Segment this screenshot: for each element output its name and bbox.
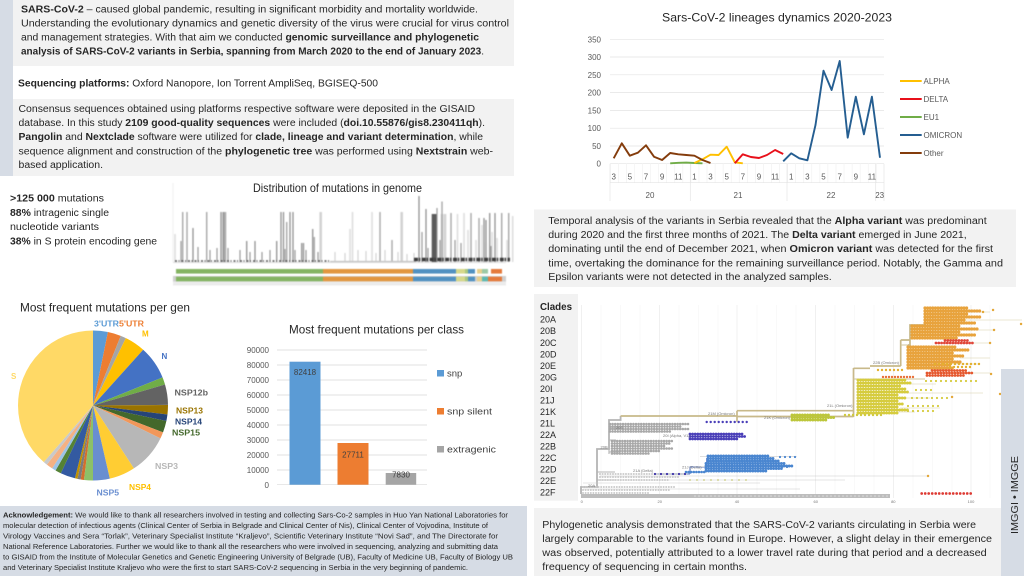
bar legend: snp silent (447, 406, 492, 418)
chart: lineage dynamics line chart: 20 (646, 191, 655, 200)
chart: lineage dynamics line chart: 1 (692, 172, 697, 182)
panel: temporal analysis: Temporal analysis of the variants in Serbia revealed that the Alpha variant was predominant (548, 216, 987, 227)
chart: lineage dynamics line chart: 3 (611, 172, 616, 182)
pie labels: NSP13 (176, 406, 204, 415)
panel: acknowledgement: Acknowledgement: We would like to thank all researchers involved in testing and collecting Sars-Co-2 samples in Huo Yan National Laboratories for (3, 510, 508, 520)
panel: clades list: Clades (540, 301, 572, 313)
panel: phylogenetic conclusion: frequency of sequencing in certain months. (542, 562, 747, 573)
panel: acknowledgement: molecular detection of infectious agents (Clinical Center of Serbia in Belgrade and Clinical Center of Nis), Clinical Center of Vojvodina, Institute of (3, 521, 489, 530)
chart: bars of mutations per class: 27711 (342, 450, 364, 460)
panel: clades list: 20B (540, 326, 556, 336)
line chart legend: Other (924, 149, 944, 158)
panel: methods: database. In this study 2109 good-quality sequences were included ( doi.10.55876/gis8.230411qh ). (18, 118, 485, 129)
pie labels: NSP3 (155, 462, 179, 471)
tree clade labels (588, 360, 900, 488)
panel: methods: sequence alignment and construction of the phylogenetic tree was performed using Nextstrain web- (18, 146, 493, 158)
panel: clades list: 22E (540, 476, 556, 486)
panel: acknowledgement: and Veterinary Specialist Institute Kraljevo who were the first to start SARS-CoV-2 sequencing in Serbia in the very beginning of pandemic. (3, 563, 468, 572)
bar legend: snp (447, 369, 462, 380)
chart: lineage dynamics line chart: 7 (741, 172, 746, 182)
panel: clades list: 20D (540, 349, 557, 359)
tree axis labels: 20 (657, 499, 663, 504)
chart: bars of mutations per class: 0 (265, 481, 270, 490)
panel: methods (13, 99, 514, 176)
chart: lineage dynamics line chart: 11 (771, 172, 780, 182)
chart: lineage dynamics line chart: 1 (789, 172, 794, 182)
panel: temporal analysis: Epsilon variants were not detected in the analyzed samples. (548, 272, 832, 283)
panel: clades list: 22D (540, 465, 557, 475)
chart: lineage dynamics line chart: 150 (588, 106, 602, 115)
pie labels (11, 320, 208, 498)
tree clade labels: 21A (Delta) (633, 468, 654, 473)
text block: mutation statistics: 88% intragenic single (10, 208, 109, 219)
tree axis labels: 40 (735, 499, 740, 504)
chart: lineage dynamics line chart: 3 (708, 172, 713, 182)
chart: lineage dynamics line chart: 300 (588, 53, 602, 62)
tree axis labels: 0 (581, 499, 584, 504)
heading: distribution of mutations: Distribution of mutations in genome (253, 181, 422, 195)
genome annotation bars (173, 269, 506, 286)
chart: lineage dynamics line chart: 5 (628, 172, 633, 182)
panel: clades list: 20G (540, 372, 557, 382)
tree clade labels: 21M (Omicron) (708, 411, 735, 416)
chart: lineage dynamics line chart: 100 (588, 124, 602, 133)
panel: acknowledgement: Virology Vaccines and Sera “Torlak”, Veterinary Specialist Institute “Kraljevo”, Scientific Veterinary Institute “Novi Sad”, and The Directorate for (3, 532, 498, 540)
pie labels: NSP15 (172, 429, 201, 438)
tree clade labels: 21J (Delta) (682, 464, 702, 470)
tree axis labels: 100 (968, 499, 975, 504)
tree axis labels (581, 499, 975, 504)
panel: introduction (13, 0, 514, 66)
heading: lineages dynamics: Sars-CoV-2 lineages dynamics 2020-2023 (662, 10, 892, 24)
pie labels: 3'UTR (94, 320, 119, 329)
pie labels: M (142, 330, 149, 339)
line chart legend: DELTA (924, 95, 949, 104)
panel: introduction: Understanding the evolutionary dynamics and genetic diversity of the virus were crucial for virus control (21, 18, 509, 30)
side strip: institute name (1001, 369, 1024, 576)
chart: lineage dynamics line chart: 23 (875, 191, 885, 200)
chart: lineage dynamics line chart: 9 (757, 172, 762, 182)
chart: lineage dynamics line chart: 7 (644, 172, 649, 182)
pie labels: 5'UTR (119, 320, 144, 329)
chart: lineage dynamics line chart: 3 (805, 172, 810, 182)
panel: clades list: 22F (540, 488, 556, 498)
chart: bars of mutations per class: 50000 (247, 406, 270, 415)
chart: bars of mutations per class: 60000 (247, 391, 270, 400)
panel: acknowledgement: to GISAID from the Institute of Molecular Genetics and Genetic Engineering University of Belgrade (UB), Faculty of Medicine UB, Faculty of Biology UB (3, 552, 513, 562)
pie labels: NSP5 (96, 489, 120, 498)
chart: lineage dynamics line chart: 0 (597, 160, 602, 169)
tree axis labels: 60 (813, 499, 819, 504)
panel: acknowledgement (0, 506, 527, 576)
panel: clades list: 20A (540, 315, 556, 325)
panel: clades list (534, 294, 578, 501)
panel: methods: based application. (18, 160, 103, 171)
chart: bars of mutations per class: 30000 (247, 436, 270, 445)
panel: clades list: 22A (540, 430, 556, 440)
heading: mutations per class: Most frequent mutations per class (289, 322, 464, 336)
line chart legend (900, 77, 962, 158)
chart: bars of mutations per class: 70000 (247, 376, 270, 385)
chart: bars of mutations per class (247, 346, 496, 490)
left accent strip (0, 0, 13, 176)
chart: pie of mutations per gene (56, 368, 130, 443)
panel: introduction: and management strategies. With that aim we conducted genomic surveillance and phylogenetic (21, 32, 479, 44)
panel: acknowledgement: National Reference Laboratories. Further we would like to thank all the researchers who were involved in sequencing, analyzing and submitting data (3, 542, 499, 551)
text block: mutation statistics: nucleotide variants (10, 222, 99, 233)
chart: lineage dynamics line chart: 50 (592, 142, 602, 151)
tree axis labels: 80 (891, 499, 896, 504)
line chart legend: OMICRON (924, 131, 962, 140)
panel: clades list: 22B (540, 442, 556, 452)
chart: lineage dynamics line chart: 350 (588, 35, 602, 44)
panel: methods: Consensus sequences obtained using platforms respective software were deposited in the GISAID (18, 104, 475, 115)
panel: clades list: 20C (540, 338, 557, 348)
chart: lineage dynamics line chart (588, 35, 962, 201)
chart: lineage dynamics line chart: 7 (837, 172, 842, 182)
tree clade labels: 20E (616, 425, 623, 430)
chart: lineage dynamics line chart: 9 (660, 172, 665, 182)
bar legend (437, 369, 496, 456)
panel: clades list: 22C (540, 453, 557, 463)
tree tips (583, 308, 1021, 496)
chart: bars of mutations per class: 10000 (247, 466, 270, 475)
tree clade labels: 20I (Alpha, V1) (663, 433, 690, 438)
bar legend: extragenic (447, 444, 496, 456)
pie labels: NSP4 (129, 483, 152, 492)
chart: lineage dynamics line chart: 5 (821, 172, 826, 182)
panel: phylogenetic conclusion: Phylogenetic analysis demonstrated that the SARS-CoV-2 variants circulating in Serbia were (542, 520, 976, 531)
chart: bars of mutations per class: 82418 (294, 368, 317, 377)
tree clade labels: 20B (600, 444, 608, 450)
chart: bars of mutations per class: 7830 (392, 470, 410, 480)
heading: mutations per gene: Most frequent mutations per gen (20, 300, 190, 314)
text block: sequencing platforms: Sequencing platforms: Oxford Nanopore, Ion Torrent AmpliSeq, BGISEQ-500 (18, 78, 378, 90)
pie labels: NSP14 (175, 417, 203, 426)
text block: mutation statistics: >125 000 mutations (10, 194, 104, 204)
line chart legend: ALPHA (924, 77, 950, 86)
line chart legend: EU1 (924, 113, 940, 122)
chart: bars of mutations per class: 80000 (247, 361, 270, 370)
text block: mutation statistics: 38% in S protein encoding gene (10, 236, 157, 248)
chart: lineage dynamics line chart: 11 (868, 172, 877, 182)
panel: clades list: 20E (540, 361, 556, 371)
panel: clades list: 21K (540, 407, 556, 417)
panel: clades list: 20I (540, 384, 553, 394)
chart: lineage dynamics line chart: 200 (588, 89, 602, 98)
panel: clades list: 21L (540, 418, 555, 428)
text block: mutation statistics (10, 194, 157, 248)
tree backbone (581, 307, 1022, 498)
pie labels: S (11, 372, 17, 381)
panel: introduction: SARS-CoV-2 – caused global pandemic, resulting in significant morbidity and mortality worldwide. (21, 4, 478, 16)
panel: temporal analysis: time, overtaking the dominance for the remaining surveillance period. Notably, the Gamma and (548, 258, 1003, 270)
chart: lineage dynamics line chart: 9 (854, 172, 859, 182)
tree clade labels: 20A (588, 483, 595, 488)
tree clade labels: 21L (Omicron) (827, 403, 853, 408)
chart: phylogenetic tree (581, 305, 1022, 504)
chart: bars of mutations per class: 90000 (247, 346, 270, 355)
tree clade labels: 22B (Omicron) (873, 360, 900, 365)
chart: mutation distribution across genome (173, 183, 513, 286)
panel: phylogenetic conclusion (534, 508, 1001, 576)
chart: bars of mutations per class: 20000 (247, 451, 270, 460)
panel: temporal analysis: dominating until the end of December 2021, when Omicron variant was detected for the first (548, 244, 993, 255)
panel: introduction: analysis of SARS-CoV-2 variants in Serbia, spanning from March 2020 to the end of January 2023. (21, 46, 484, 58)
panel: phylogenetic conclusion: was observed, potentially attributed to a lower travel rate during that period and a decreased (541, 548, 987, 559)
chart: lineage dynamics line chart: 250 (588, 71, 602, 80)
panel: temporal analysis: during 2020 and the first three months of 2021. The Delta variant emerged in June 2021, (548, 230, 967, 241)
side strip: institute name: IMGGI • IMGGE (1009, 456, 1021, 534)
tree clade labels: 21K (Omicron) (764, 415, 791, 420)
chart: lineage dynamics line chart: 21 (734, 191, 743, 200)
pie labels: N (162, 352, 168, 361)
panel: temporal analysis (534, 210, 1016, 287)
chart: lineage dynamics line chart: 11 (674, 172, 683, 182)
chart: lineage dynamics line chart: 5 (724, 172, 729, 182)
panel: clades list: 21J (540, 395, 555, 405)
pie labels: NSP12b (174, 389, 208, 398)
chart: lineage dynamics line chart: 22 (827, 191, 836, 200)
chart: bars of mutations per class: 40000 (247, 421, 270, 430)
panel: methods: Pangolin and Nextclade software were utilized for clade, lineage and variant determination , while (18, 132, 483, 143)
panel: phylogenetic conclusion: largely comparable to the variants found in Europe. However, a slight delay in their emergence (542, 534, 992, 545)
